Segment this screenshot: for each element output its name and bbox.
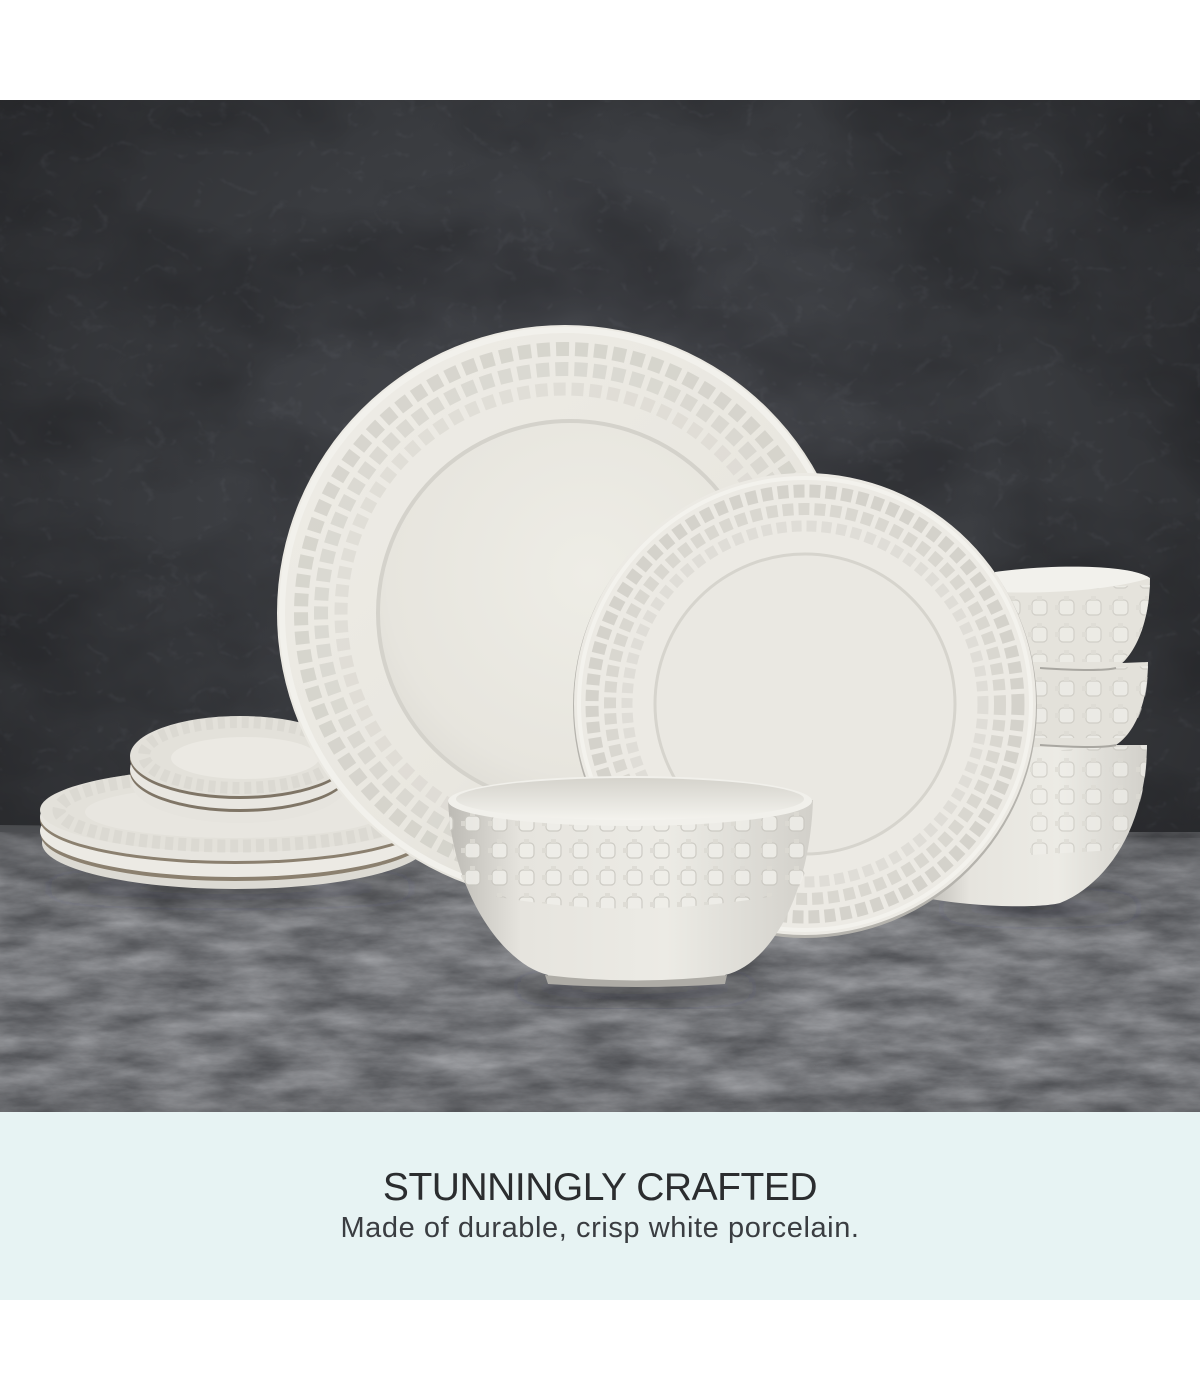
top bowl xyxy=(995,572,1150,670)
backdrop: dark textured wall xyxy=(0,100,1200,840)
stacked bowls, right xyxy=(925,567,1150,906)
rim shadow lines between bowls xyxy=(1040,668,1116,747)
bottom bowl xyxy=(925,745,1147,906)
cereal bowl, front xyxy=(440,776,820,987)
salad plate, front xyxy=(573,473,1037,938)
subheading: Made of durable, crisp white porcelain. xyxy=(340,1212,860,1244)
product photo: porcelain dinnerware set xyxy=(0,100,1200,1112)
cast shadows xyxy=(40,879,1145,997)
middle bowl xyxy=(1000,662,1148,748)
large dinner plate xyxy=(277,325,853,901)
stacked salad plates, rear left xyxy=(130,716,350,823)
caption band xyxy=(0,1112,1200,1300)
stacked dinner plates, front left xyxy=(40,768,430,889)
heading: STUNNINGLY CRAFTED xyxy=(383,1166,817,1209)
table surface: grey stone xyxy=(0,825,1200,1112)
